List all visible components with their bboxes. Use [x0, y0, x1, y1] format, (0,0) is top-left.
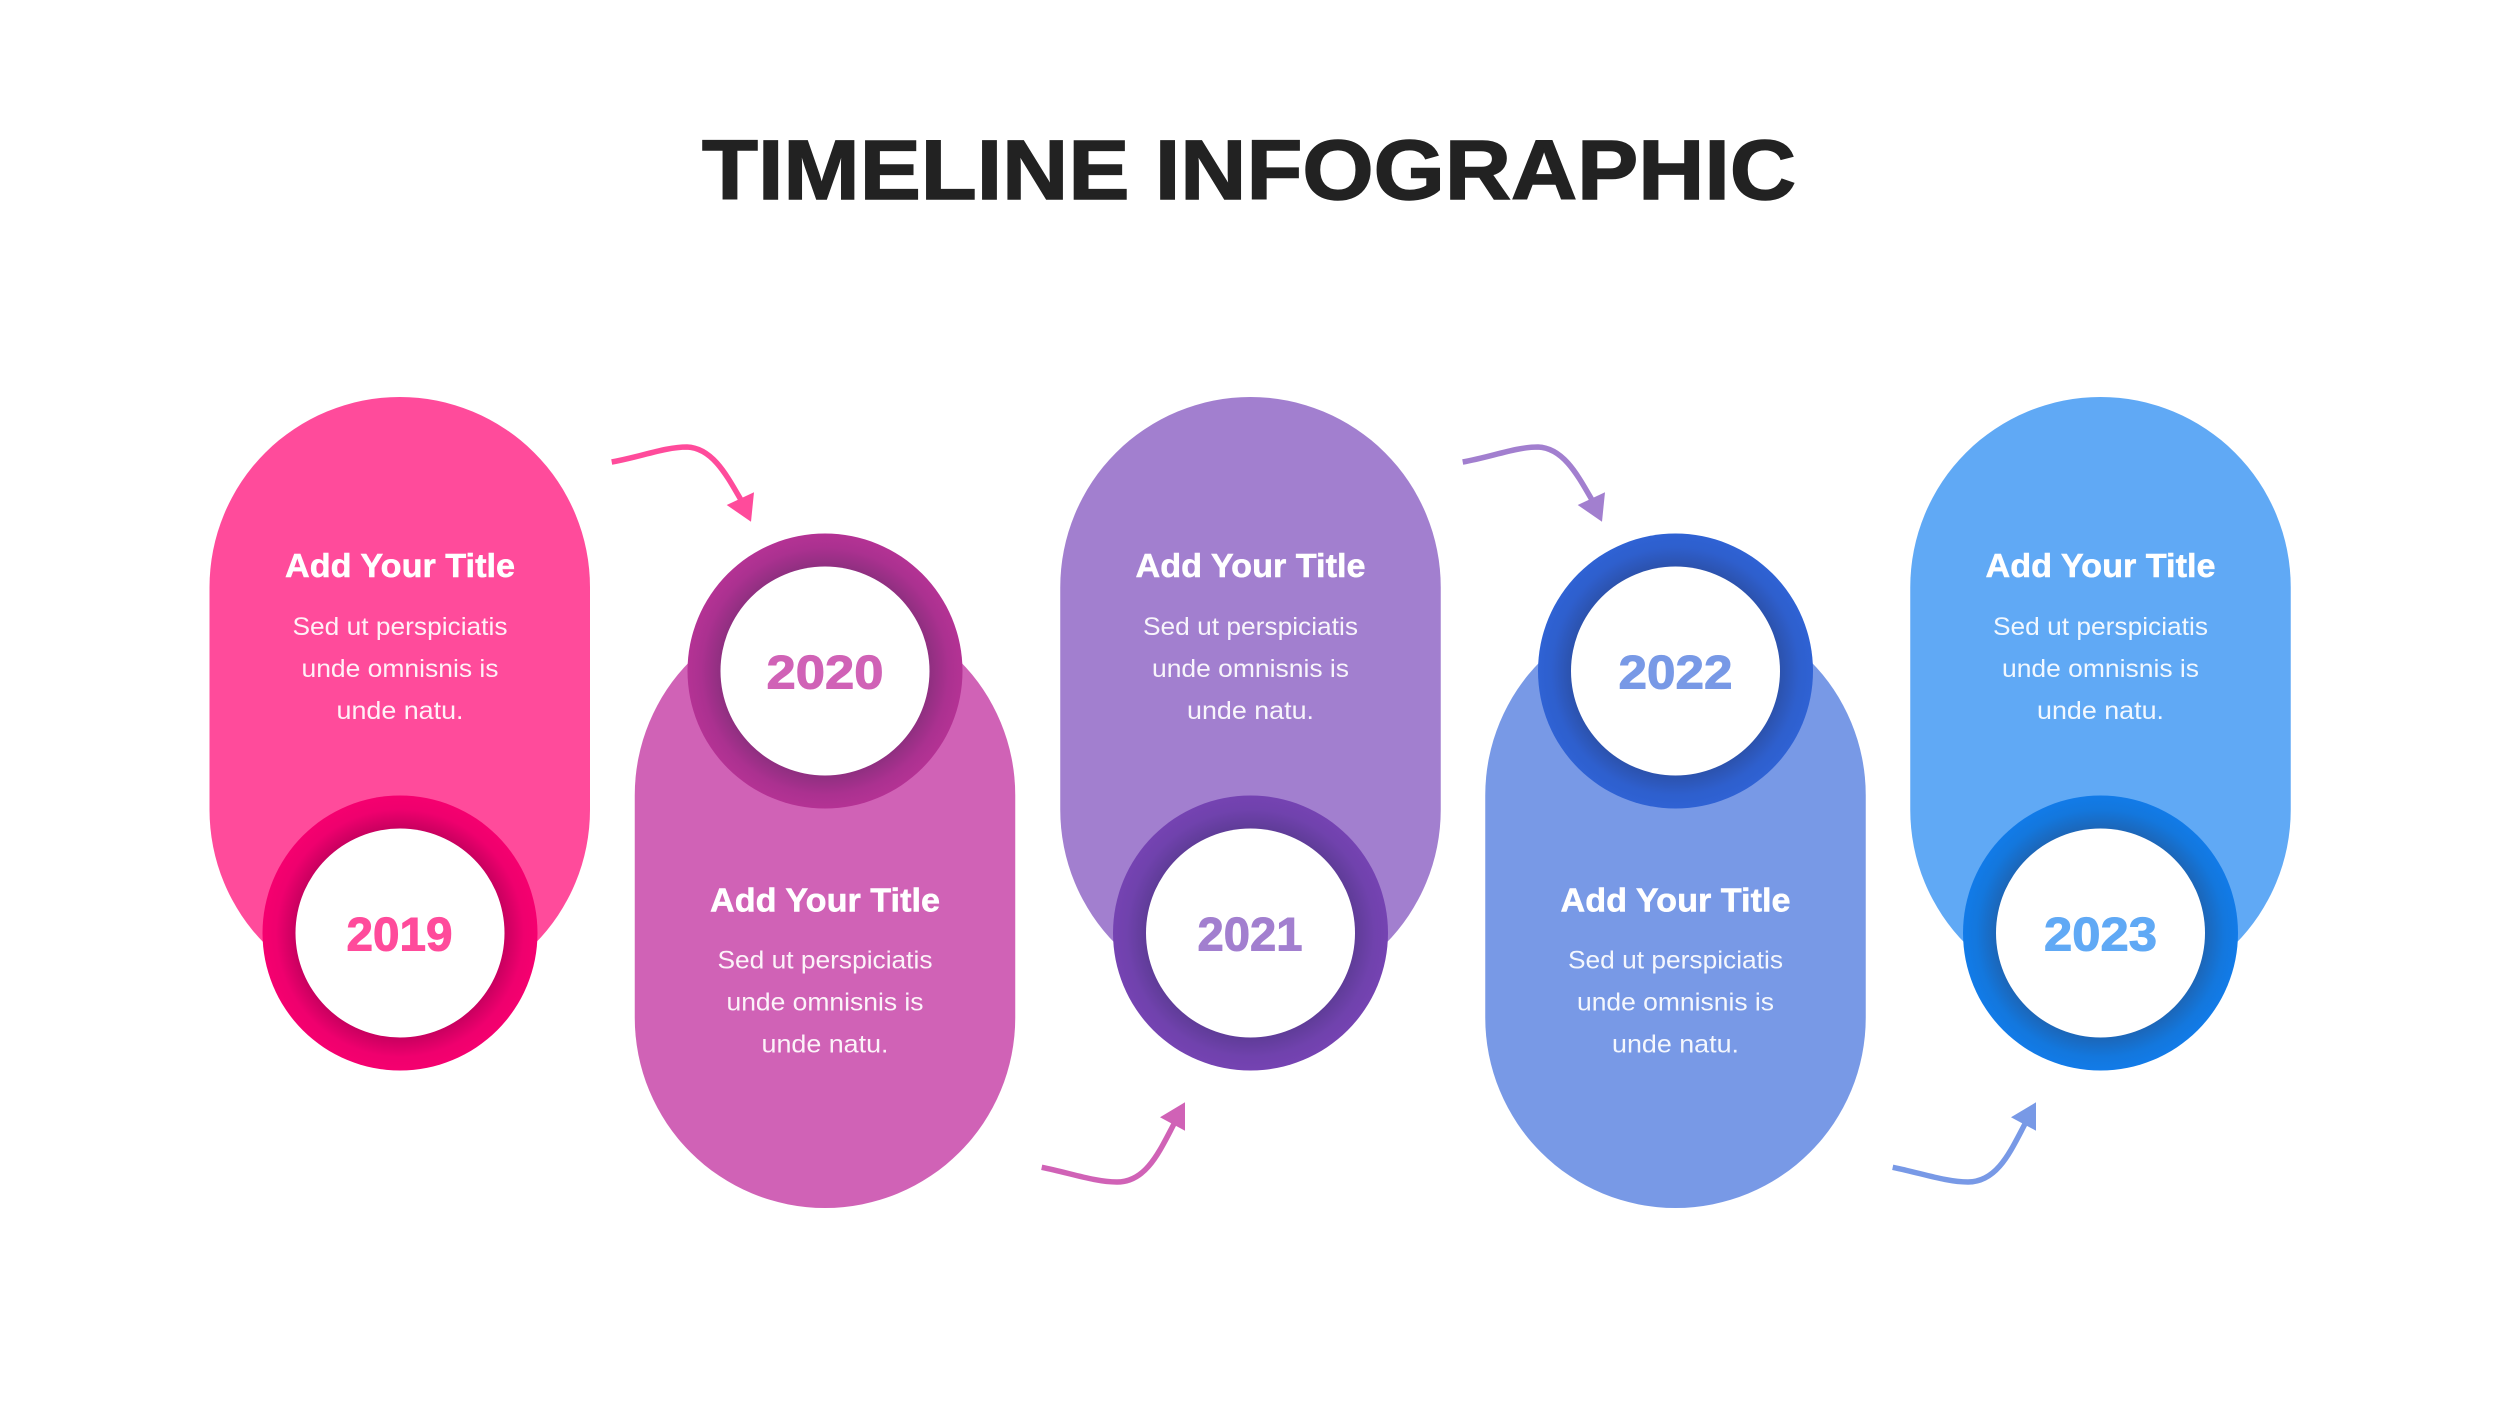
panel: 2019 [210, 397, 590, 1070]
ring 2022 [1538, 534, 1813, 808]
card text 2019 [292, 613, 508, 725]
card title 2022: Add Your Title [1560, 882, 1790, 918]
year 2022: 2022 [1618, 646, 1732, 698]
card text 2020 [718, 946, 932, 1058]
card text 2023 [1993, 613, 2208, 725]
ring 2021 [1113, 796, 1388, 1070]
title: TIMELINE INFOGRAPHIC [702, 123, 1796, 217]
card title 2023: Add Your Title [1986, 547, 2216, 584]
card text 2020: Sed ut perspiciatis [718, 946, 932, 974]
card text 2022: unde natu. [1612, 1030, 1739, 1058]
arrow: 2019 to 2020 [612, 447, 754, 522]
year 2020: 2020 [766, 646, 884, 698]
card text 2020: unde natu. [762, 1030, 888, 1058]
year 2021: 2021 [1198, 908, 1302, 960]
panel: 2023 [1910, 397, 2291, 1070]
card text 2023: unde omnisnis is [2002, 655, 2199, 683]
pill background 2023 [1910, 397, 2291, 1000]
card text 2022 [1568, 946, 1783, 1058]
card text 2021: Sed ut perspiciatis [1143, 613, 1358, 641]
pill background 2020 [635, 605, 1015, 1208]
card text 2023: Sed ut perspiciatis [1993, 613, 2208, 641]
panel: 2021 [1060, 397, 1441, 1070]
card text 2022: unde omnisnis is [1577, 988, 1774, 1016]
pill background 2019 [210, 397, 590, 1000]
arrow: 2021 to 2022 [1463, 447, 1605, 522]
ring 2023 [1963, 796, 2238, 1070]
card text 2021 [1143, 613, 1358, 725]
pill background 2022 [1485, 605, 1866, 1208]
year 2023: 2023 [2044, 908, 2157, 960]
card title 2021: Add Your Title [1136, 547, 1366, 584]
panel: 2022 [1485, 534, 1866, 1208]
card text 2019: unde omnisnis is [302, 655, 498, 683]
arrow: 2020 to 2021 [1042, 1102, 1185, 1182]
card text 2019: unde natu. [336, 697, 464, 725]
panel: 2020 [635, 534, 1015, 1208]
arrow: 2022 to 2023 [1893, 1102, 2036, 1182]
ring 2020 [688, 534, 962, 808]
ring 2019 [262, 796, 538, 1070]
card title 2020: Add Your Title [710, 882, 940, 918]
card text 2020: unde omnisnis is [726, 988, 924, 1016]
card title 2019: Add Your Title [285, 547, 515, 584]
year 2019: 2019 [346, 908, 452, 960]
card text 2021: unde natu. [1187, 697, 1314, 725]
card text 2023: unde natu. [2037, 697, 2164, 725]
card text 2022: Sed ut perspiciatis [1568, 946, 1783, 974]
card text 2019: Sed ut perspiciatis [292, 613, 508, 641]
card text 2021: unde omnisnis is [1152, 655, 1349, 683]
pill background 2021 [1060, 397, 1441, 1000]
